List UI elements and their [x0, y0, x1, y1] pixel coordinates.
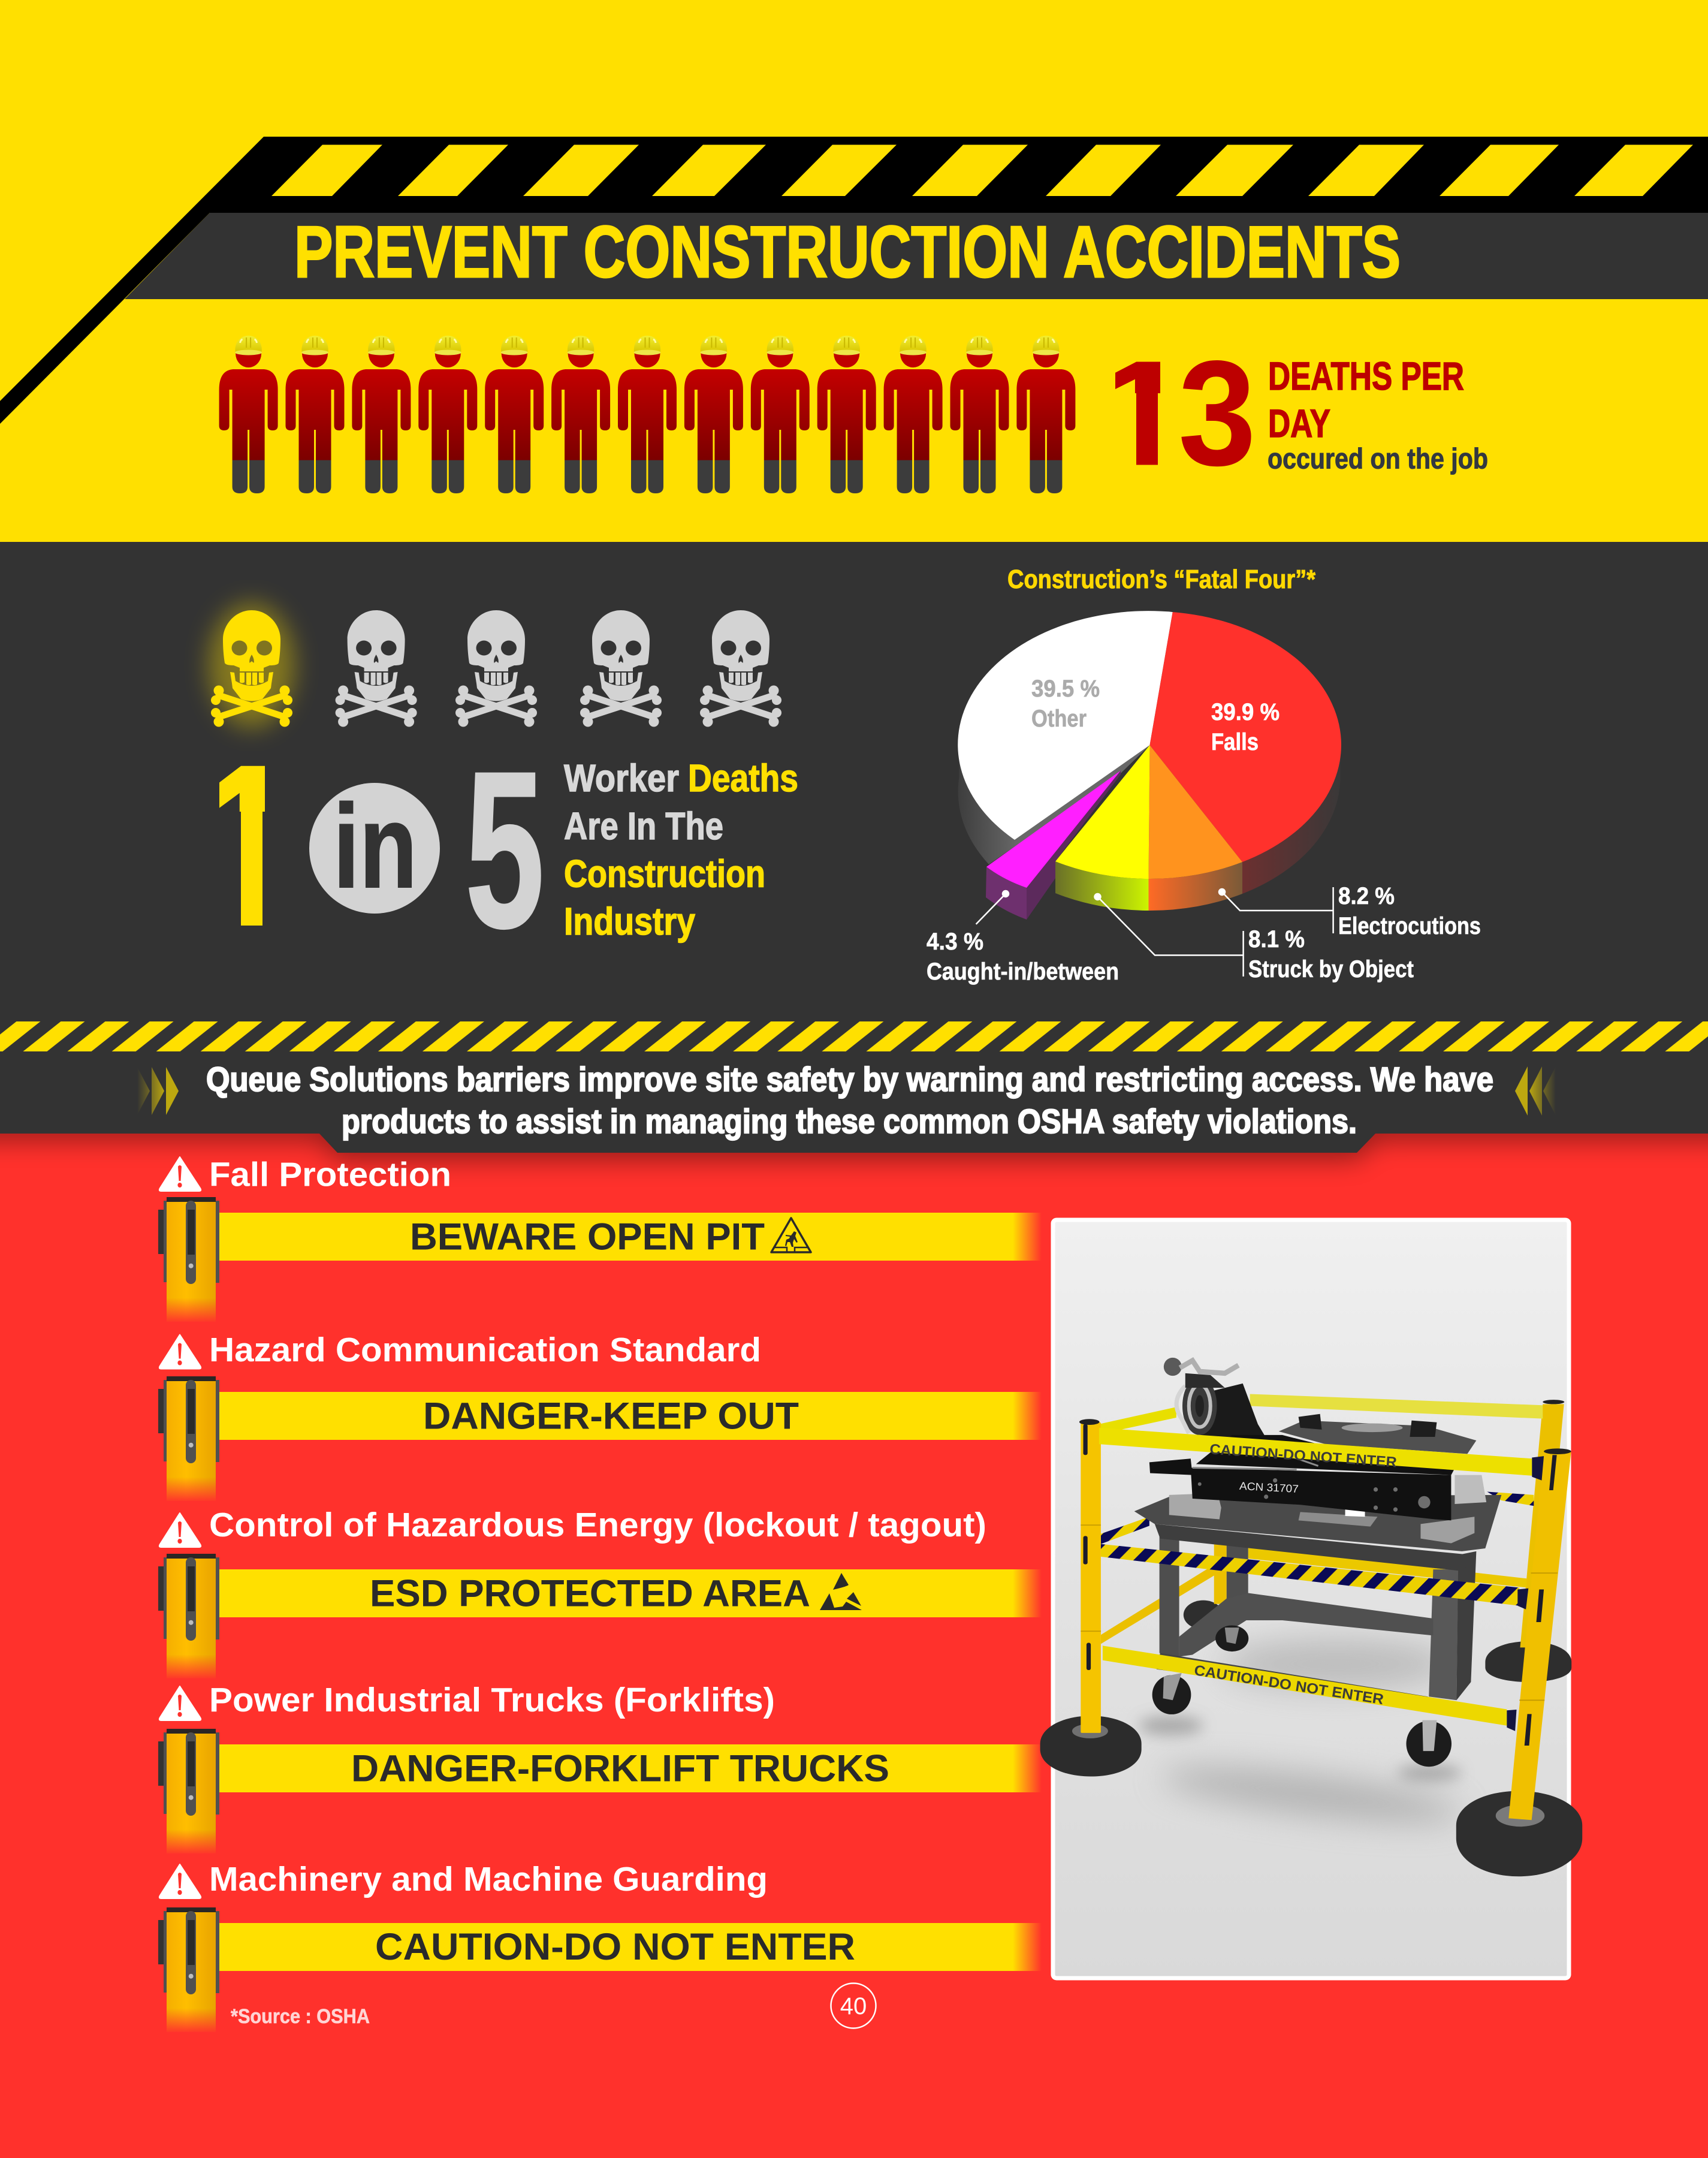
pie label: electrocutions [1338, 883, 1481, 939]
barrier post [158, 1197, 219, 1323]
slice: falls [1149, 612, 1341, 862]
back posts [1214, 1404, 1564, 1647]
front tapes [1099, 1428, 1532, 1726]
shadow under banner [0, 1115, 1708, 1159]
hazard stripe strip [0, 1021, 1708, 1051]
barrier tape [218, 1569, 1042, 1617]
worker deaths statement [564, 756, 798, 943]
slice: other [958, 611, 1173, 840]
icon: falling into pit sign [771, 1218, 811, 1252]
slice: caught-in/between [986, 771, 1121, 888]
1 in 5 numerals: 1 [194, 716, 303, 975]
1 in 5 numerals: in [333, 780, 417, 912]
deaths per day text [1268, 354, 1488, 475]
side wall: electrocutions [1148, 862, 1242, 911]
photo: machinery inside retractable barriers [1040, 1358, 1582, 1876]
pie label: struck by object: 8.1 % [1248, 926, 1305, 953]
worker deaths statement: Industry [564, 900, 695, 943]
machine blocks [1169, 1475, 1486, 1544]
back tapes [1099, 1394, 1543, 1644]
slice: struck by object [1055, 745, 1149, 879]
barrier tape [218, 1392, 1042, 1440]
deaths per day text: occured on the job [1268, 444, 1488, 475]
pie chart heading: Construction’s “Fatal Four”* [1007, 565, 1316, 594]
barrier tape [218, 1744, 1042, 1792]
pie label: caught-in/between [927, 929, 1119, 985]
heading: Hazard Communication Standard [209, 1331, 761, 1369]
warning icon [159, 1334, 201, 1369]
violation 5: machine guarding [158, 1860, 1042, 2033]
big number 13: 3 [1178, 330, 1256, 496]
tape holders [1507, 1456, 1544, 1731]
heading: Power Industrial Trucks (Forklifts) [209, 1681, 775, 1719]
big number 13: 1 [1091, 329, 1196, 497]
barrier post [158, 1376, 219, 1502]
barrier tape [218, 1923, 1042, 1971]
warning icon [159, 1864, 201, 1898]
deaths per day text: DAY [1268, 401, 1330, 445]
floor shadows [1139, 1638, 1463, 1833]
front left post [1040, 1419, 1142, 1777]
side wall: struck by object [1055, 861, 1148, 911]
hazard stripes in caution band [271, 145, 1693, 196]
barrier post [158, 1554, 219, 1680]
pie label: falls: 39.9 % [1211, 699, 1280, 725]
table frame [1155, 1524, 1476, 1704]
leader line: caught-in/between [976, 891, 1009, 924]
tape message: BEWARE OPEN PIT [410, 1216, 765, 1258]
violation 2: hazard communication [158, 1331, 1042, 1502]
casters [1152, 1625, 1452, 1767]
pie label: falls: Falls [1211, 729, 1259, 755]
side wall: falls [1242, 745, 1340, 894]
black caution band with diagonal edge [0, 137, 1708, 424]
banner statement: Queue Solutions barriers improve site safety by warning and restricting access. We have [206, 1060, 1493, 1099]
violation 1: fall protection [158, 1156, 1042, 1323]
pie label: electrocutions: 8.2 % [1338, 883, 1395, 909]
long black machine [1149, 1435, 1462, 1520]
banner statement [206, 1060, 1493, 1141]
back post cap [1543, 1400, 1564, 1404]
3D pie chart: fatal four [958, 611, 1341, 920]
pie label: struck by object [1248, 926, 1414, 982]
violation 4: forklifts [158, 1681, 1042, 1855]
left arrows [137, 1067, 179, 1115]
dark statistics panel [0, 542, 1708, 1134]
five skulls, one in five highlighted [209, 603, 781, 728]
warning icon [159, 1686, 201, 1720]
warning icon [159, 1157, 201, 1191]
right arrows [1515, 1066, 1556, 1116]
side wall: other [958, 745, 1149, 864]
tape text lower: CAUTION-DO NOT ENTER [1193, 1662, 1385, 1708]
heading: Control of Hazardous Energy (lockout / tagout) [209, 1506, 986, 1544]
table top [1134, 1495, 1501, 1551]
tape message: ESD PROTECTED AREA [370, 1573, 810, 1615]
pie label: caught-in/between: 4.3 % [927, 929, 983, 955]
source note: *Source : OSHA [231, 2005, 370, 2028]
barrier post [158, 1907, 219, 2033]
pie label: electrocutions: Electrocutions [1338, 913, 1481, 939]
tape text upper: CAUTION-DO NOT ENTER [1209, 1441, 1398, 1471]
engine fixture [1164, 1358, 1265, 1444]
tape message: DANGER-KEEP OUT [423, 1396, 799, 1437]
worker deaths statement: Deaths [688, 756, 798, 800]
banner notch [319, 1133, 1376, 1153]
background: red section [0, 1127, 1708, 2158]
upper fixture plate [1279, 1421, 1476, 1454]
machine bolts [1198, 1478, 1431, 1512]
title bar [125, 213, 1708, 299]
pie label: struck by object: Struck by Object [1248, 956, 1414, 982]
barrier tape [218, 1213, 1042, 1261]
front right post [1456, 1448, 1582, 1876]
big number 13 [1115, 360, 1251, 466]
deaths per day text: DEATHS PER [1268, 354, 1464, 398]
1 in 5 numerals [194, 716, 544, 975]
barrier post [158, 1729, 219, 1855]
tape message: DANGER-FORKLIFT TRUCKS [351, 1748, 889, 1790]
1 in 5 numerals: 5 [465, 725, 544, 975]
icon: electrostatic discharge sign [820, 1573, 862, 1610]
background: yellow section [0, 0, 1708, 542]
pie label: other: 39.5 % [1031, 676, 1100, 702]
back bases [1184, 1601, 1571, 1682]
leader line: electrocutions [1219, 887, 1333, 933]
heading: Machinery and Machine Guarding [209, 1860, 768, 1898]
leader line: struck by object [1094, 894, 1244, 976]
violation 3: hazardous energy [158, 1506, 1042, 1680]
machine rail [1193, 1446, 1318, 1469]
warning icon [159, 1513, 201, 1547]
pie label: caught-in/between: Caught-in/between [927, 959, 1119, 985]
slice: electrocutions [1148, 745, 1242, 879]
pie label: falls [1211, 699, 1280, 755]
pie label: other: Other [1031, 706, 1087, 732]
page number [831, 1983, 876, 2029]
photo panel [1053, 1220, 1569, 1978]
exploded slice wall [1027, 771, 1121, 920]
page number: 40 [840, 1993, 867, 2020]
heading: Fall Protection [209, 1156, 451, 1194]
worker deaths statement: Are In The [564, 804, 723, 848]
tape message: CAUTION-DO NOT ENTER [375, 1926, 855, 1968]
exploded slice outer wall [986, 867, 1027, 920]
title: PREVENT CONSTRUCTION ACCIDENTS [294, 211, 1401, 293]
banner statement: products to assist in managing these common OSHA safety violations. [342, 1102, 1357, 1141]
pie label: other [1031, 676, 1100, 732]
machine marking: ACN 31707 [1239, 1480, 1299, 1495]
worker deaths statement: Construction [564, 852, 765, 896]
clamps [1299, 1414, 1437, 1437]
worker deaths statement: Worker [564, 756, 679, 800]
row of 13 workers with hard hats [219, 336, 1075, 493]
